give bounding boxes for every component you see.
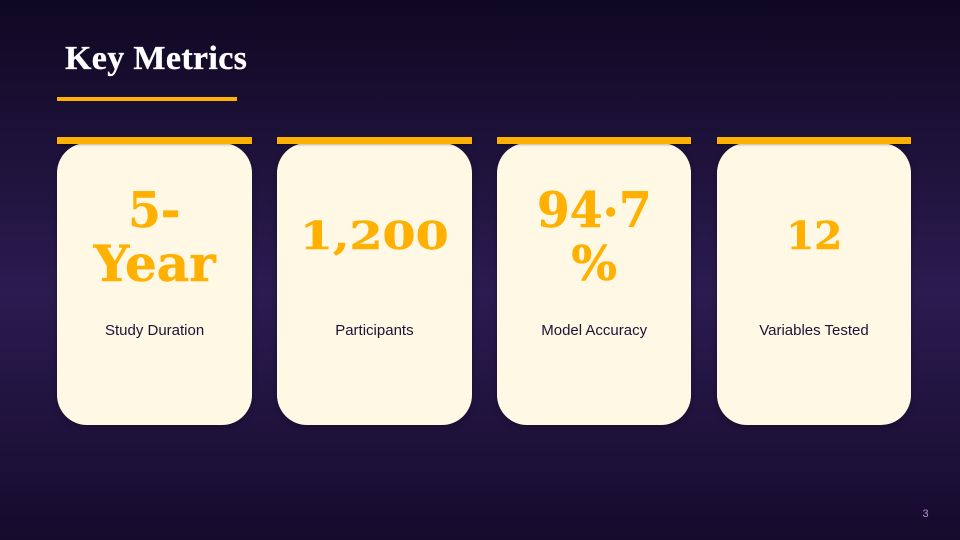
metric value: 5-: [128, 181, 181, 239]
card accent bar: [277, 137, 472, 144]
card body: [717, 143, 911, 425]
metric value: 1,200: [300, 213, 449, 258]
card accent bar: [57, 137, 252, 144]
card accent bar: [497, 137, 691, 144]
metric value: [92, 181, 216, 293]
page number: 3: [922, 508, 929, 520]
metric value: 12: [786, 213, 842, 258]
metric label: Participants: [335, 322, 414, 339]
metric label: Study Duration: [105, 322, 204, 339]
panel: model accuracy: [496, 137, 692, 428]
metric label: Model Accuracy: [541, 322, 647, 339]
panel: study duration: [56, 137, 253, 428]
panel: variables tested: [716, 137, 912, 428]
card body: [277, 143, 472, 425]
title underline: [57, 97, 237, 101]
card body: [497, 143, 691, 425]
card accent bar: [717, 137, 911, 144]
metric value: Year: [94, 234, 216, 293]
title: Key Metrics: [65, 40, 247, 76]
panel: participants: [276, 137, 473, 428]
metric value: %: [571, 236, 617, 292]
metric value: [537, 170, 651, 292]
metric label: Variables Tested: [759, 322, 869, 339]
metric value: 94.7: [537, 170, 651, 239]
card body: [57, 143, 252, 425]
